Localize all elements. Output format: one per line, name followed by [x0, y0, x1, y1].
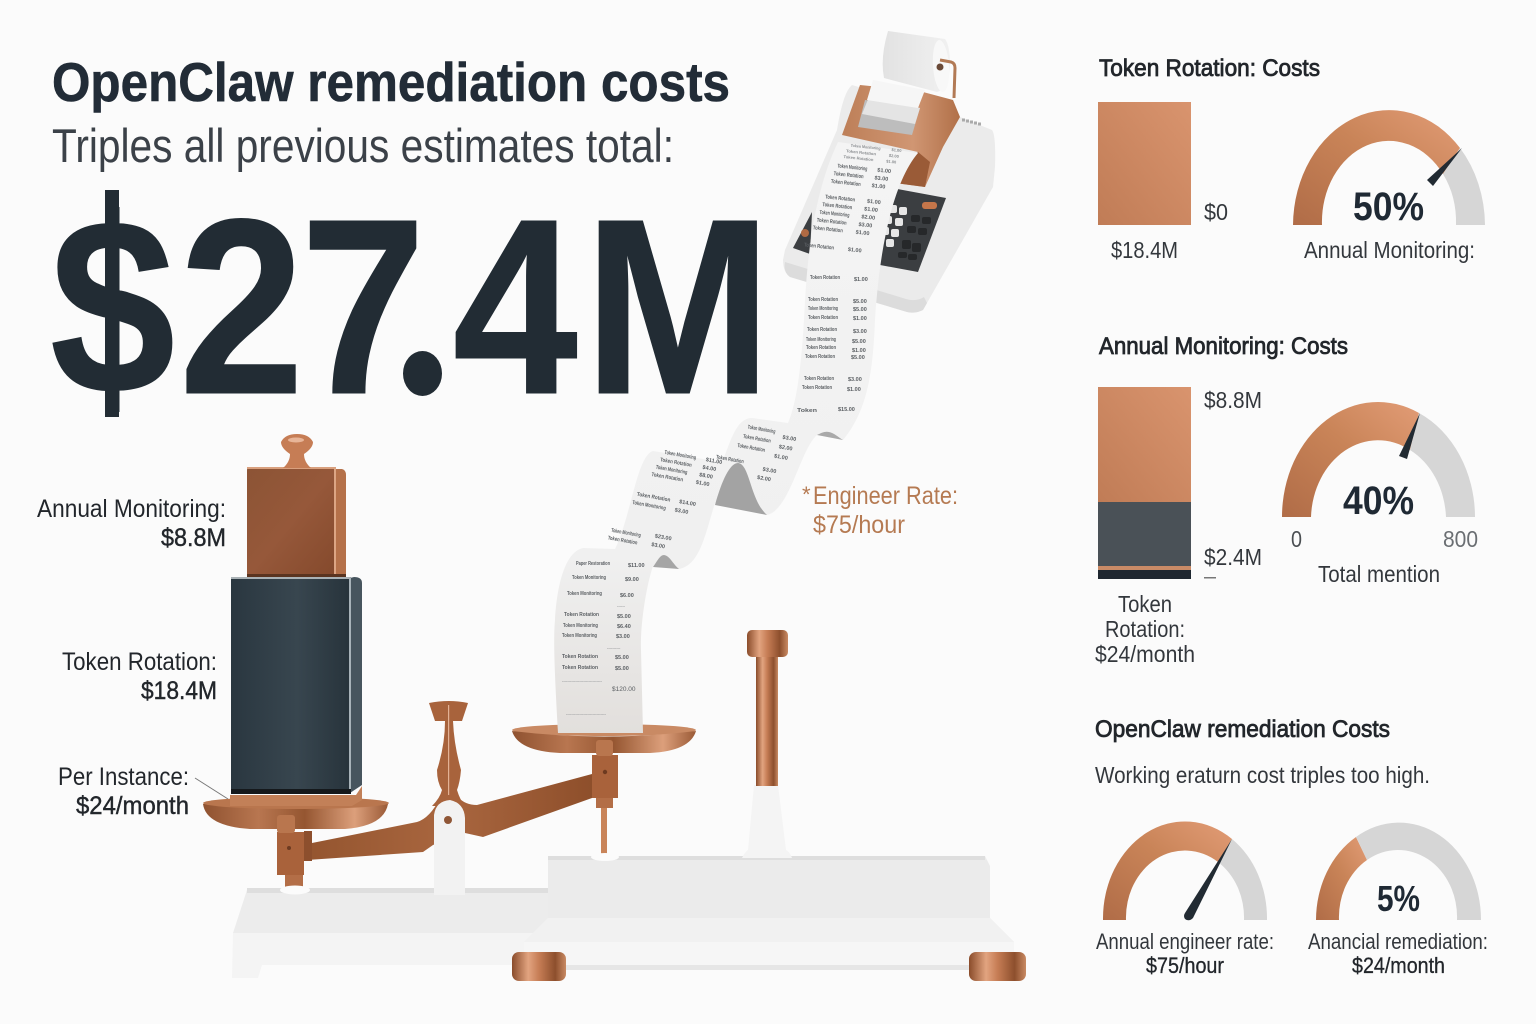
receipt line items: second section: $4.00	[702, 465, 717, 473]
fulcrum	[429, 701, 468, 806]
receipt line items: second section: $3.00	[651, 542, 665, 550]
receipt line items: lower section	[562, 561, 645, 716]
receipt line items: second section: $23.00	[654, 534, 672, 542]
receipt line items: on machine: $3.00	[874, 175, 888, 183]
label: per instance	[58, 763, 228, 820]
scale base: right plinth	[524, 856, 1014, 965]
receipt line items: fourth section: Token Rotation	[810, 275, 840, 281]
receipt line items: fourth section: Token Rotation	[804, 376, 834, 382]
headline total figure: 7	[301, 168, 426, 447]
panel: annual monitoring costs	[1095, 333, 1478, 667]
receipt line items: second section: $8.00	[699, 472, 713, 481]
receipt line items: lower section: $6.00	[620, 593, 634, 599]
receipt line items: fourth section	[797, 275, 868, 414]
receipt line items: lower section: Token Rotation	[564, 612, 600, 618]
receipt line items: fourth section: $5.00	[853, 299, 867, 305]
receipt line items: on machine: $2.00	[861, 214, 875, 222]
receipt line items: lower section: Token Monitoring	[562, 633, 597, 639]
receipt line items: second section: $3.00	[674, 508, 689, 516]
right pan back rim	[512, 724, 696, 736]
receipt line items: fourth section: $5.00	[851, 355, 865, 361]
receipt line items: third section: Token Monitoring	[747, 425, 776, 435]
copper feet	[512, 952, 1026, 981]
receipt line items: third section: $3.00	[782, 435, 797, 443]
panel: token rotation costs	[1098, 55, 1485, 263]
receipt line items: fourth section: Token Monitoring	[808, 306, 838, 312]
heading: Annual Monitoring: Costs	[1099, 333, 1348, 360]
gauge: 40%	[1282, 402, 1478, 587]
receipt line items: on machine: $1.00	[855, 230, 870, 237]
receipt line items: lower section: ------	[617, 603, 626, 608]
receipt line items: fourth section: Token	[797, 408, 818, 414]
receipt line items: lower section: Token Monitoring	[572, 575, 606, 581]
headline total figure: M	[584, 168, 772, 447]
receipt line items: on machine: $1.00	[886, 159, 897, 165]
receipt line items: third section: $2.00	[778, 444, 793, 453]
copper weight	[247, 434, 346, 577]
receipt line items: lower section: $5.00	[615, 666, 629, 672]
receipt line items: fourth section: $1.00	[852, 348, 866, 354]
label: per instance: Per Instance:	[58, 763, 189, 791]
receipt line items: second section	[607, 443, 723, 559]
receipt line items: on machine: Token Monitoring	[819, 210, 850, 219]
receipt line items: third section	[713, 420, 797, 486]
stacked bar chart: Token	[1118, 591, 1172, 617]
gauge: 40%: Total mention	[1318, 561, 1440, 587]
receipt line items: fourth section: Token Rotation	[802, 385, 832, 391]
balance beam	[307, 774, 592, 860]
receipt line items: fourth section: Token Monitoring	[806, 337, 836, 343]
receipt line items: fourth section: Token Rotation	[808, 297, 838, 303]
label: token rotation: Token Rotation:	[62, 648, 217, 676]
left pan	[203, 797, 389, 833]
receipt line items: on machine: Token Rotation	[804, 242, 835, 252]
panel: openclaw remediation costs	[1095, 716, 1488, 978]
heading: Token Rotation: Costs	[1099, 55, 1320, 82]
receipt line items: on machine: $1.00	[847, 247, 862, 254]
receipt line items: second section: Token Rotation	[607, 535, 638, 547]
receipt line items: third section: Token Rotation	[716, 455, 745, 465]
label: token rotation	[62, 648, 217, 705]
description: Working eraturn cost triples too high.	[1095, 762, 1430, 788]
receipt line items: lower section: ------------------------------	[566, 711, 607, 716]
receipt line items: on machine: Token Monitoring	[851, 143, 881, 151]
receipt line items: fourth section: $1.00	[854, 277, 868, 283]
gauge: 5%: $24/month	[1352, 953, 1445, 978]
label: annual monitoring	[37, 495, 226, 552]
receipt line items: on machine: Token Rotation	[825, 194, 856, 204]
gauge: 50%	[1293, 110, 1485, 263]
gauge: annual engineer rate: Annual engineer rate:	[1096, 929, 1274, 954]
stacked bar chart	[1095, 387, 1262, 667]
receipt line items: lower section: $5.00	[615, 655, 629, 661]
receipt line items: fourth section: Token Rotation	[806, 345, 836, 351]
receipt line items: fourth section: $15.00	[838, 407, 855, 413]
receipt line items: fourth section: Token Rotation	[808, 315, 838, 321]
receipt line items: third section: $3.00	[762, 467, 777, 475]
receipt line items: lower section: ----------	[607, 645, 621, 650]
receipt line items: on machine	[804, 139, 903, 258]
receipt line items: on machine: $1.00	[871, 183, 886, 191]
receipt line items: on machine: Token Rotation	[816, 218, 847, 227]
receipt line items: on machine: $1.00	[864, 206, 878, 214]
label: per instance: $24/month	[76, 792, 189, 820]
receipt line items: second section: Token Rotation	[660, 457, 693, 469]
gauge: 40%: 800	[1443, 526, 1478, 552]
receipt line items: on machine: $3.00	[858, 222, 872, 229]
bar chart	[1098, 102, 1228, 263]
receipt line items: on machine: Token Rotation	[846, 148, 877, 156]
headline total figure: $	[50, 168, 175, 447]
receipt line items: fourth section: $5.00	[853, 307, 867, 313]
receipt line items: second section: Token Monitoring	[611, 528, 641, 539]
receipt line items: on machine: $1.00	[891, 147, 903, 153]
callout: engineer rate: *	[802, 482, 811, 507]
receipt line items: fourth section: $1.00	[853, 316, 867, 322]
receipt line items: on machine: Token Rotation	[833, 171, 864, 180]
gauge: 5%	[1308, 823, 1488, 978]
receipt ribbon	[554, 139, 918, 733]
receipt line items: on machine: Token Rotation	[831, 179, 861, 188]
receipt line items: second section: $14.00	[679, 499, 696, 508]
receipt line items: on machine: $1.00	[877, 168, 891, 175]
receipt line items: third section: Token Rotation	[737, 443, 766, 454]
receipt line items: lower section: Token Monitoring	[567, 591, 602, 597]
receipt line items: fourth section: $5.00	[852, 339, 866, 345]
receipt line items: third section: Token Rotation	[743, 434, 772, 445]
callout: engineer rate: Engineer Rate:	[813, 482, 958, 510]
callout: engineer rate	[802, 482, 958, 539]
receipt line items: lower section: Token Monitoring	[563, 623, 598, 629]
receipt line items: lower section: $6.40	[617, 624, 631, 630]
receipt line items: lower section: $120.00	[612, 686, 636, 693]
title: OpenClaw remediation costs	[52, 51, 730, 113]
receipt line items: lower section: $9.00	[625, 577, 639, 583]
receipt line items: on machine: Token Rotation	[822, 202, 853, 211]
headline total figure	[50, 168, 772, 447]
receipt line items: second section: Token Rotation	[651, 472, 684, 484]
receipt line items: lower section: ------------------------------	[562, 678, 603, 683]
bar chart: $0	[1204, 199, 1228, 225]
headline total figure: 4	[453, 168, 578, 447]
receipt line items: on machine: Token Monitoring	[837, 163, 868, 173]
right hanger	[591, 755, 619, 861]
receipt line items: on machine: Token Rotation	[813, 225, 844, 234]
receipt line items: fourth section: $3.00	[853, 329, 867, 335]
receipt line items: third section: $1.00	[774, 454, 788, 462]
receipt line items: second section: $1.00	[695, 480, 710, 488]
bar chart: $18.4M	[1111, 237, 1178, 263]
receipt line items: lower section: Token Rotation	[562, 654, 599, 660]
receipt line items: lower section: $3.00	[616, 634, 630, 640]
callout: engineer rate: $75/hour	[813, 511, 905, 539]
receipt line items: second section: $11.00	[705, 457, 723, 466]
receipt line items: fourth section: $1.00	[847, 387, 861, 393]
subtitle: Triples all previous estimates total:	[52, 119, 674, 172]
right pan	[512, 731, 696, 756]
gauge: 40%: 40%	[1343, 479, 1414, 523]
adding machine illustration	[783, 31, 995, 313]
stacked bar chart: $2.4M	[1204, 544, 1262, 570]
heading: OpenClaw remediation Costs	[1095, 716, 1390, 743]
label: annual monitoring: $8.8M	[161, 524, 226, 552]
gauge: 40%: 0	[1291, 526, 1302, 552]
stacked weights	[230, 434, 362, 806]
headline total figure: .	[407, 275, 437, 408]
stacked bar chart: $24/month	[1095, 641, 1195, 667]
receipt line items: fourth section: Token Rotation	[805, 354, 835, 360]
left hanger	[277, 831, 312, 894]
receipt line items: lower section: Token Rotation	[562, 665, 599, 671]
stacked bar chart: $8.8M	[1204, 387, 1262, 413]
gauge: annual engineer rate	[1096, 821, 1274, 978]
label: annual monitoring: Annual Monitoring:	[37, 495, 226, 523]
headline total figure: 2	[179, 168, 304, 447]
stacked bar chart: Rotation:	[1105, 616, 1185, 642]
slate weight	[231, 577, 362, 794]
gauge: 5%: 5%	[1377, 878, 1420, 919]
balance scale illustration	[203, 630, 1026, 981]
copper base plate	[230, 786, 362, 806]
receipt line items: lower section: $5.00	[617, 614, 631, 620]
gauge: 50%: Annual Monitoring:	[1304, 237, 1475, 263]
receipt line items: on machine: $1.00	[867, 199, 881, 206]
center bracket	[434, 800, 465, 895]
receipt line items: second section: Token Monitoring	[655, 465, 688, 476]
receipt line items: fourth section: $3.00	[848, 377, 862, 383]
receipt line items: on machine: $2.00	[889, 153, 900, 159]
gauge: 5%: Anancial remediation:	[1308, 929, 1488, 954]
receipt line items: third section: $2.00	[757, 475, 771, 483]
receipt line items: lower section: Paper Restoration	[576, 561, 610, 567]
label: token rotation: $18.4M	[141, 677, 217, 705]
receipt line items: second section: Token Rotation	[636, 492, 671, 504]
receipt line items: fourth section: Token Rotation	[807, 327, 837, 333]
receipt line items: second section: Token Monitoring	[632, 500, 666, 512]
receipt line items: second section: Token Monitoring	[664, 450, 697, 461]
gauge: 50%: 50%	[1353, 185, 1424, 229]
receipt line items: lower section: $11.00	[628, 563, 645, 569]
gauge: annual engineer rate: $75/hour	[1146, 953, 1224, 978]
receipt line items: on machine: Token Rotation	[843, 154, 874, 162]
upright post	[742, 630, 792, 858]
scale base: left plinth	[232, 890, 548, 978]
